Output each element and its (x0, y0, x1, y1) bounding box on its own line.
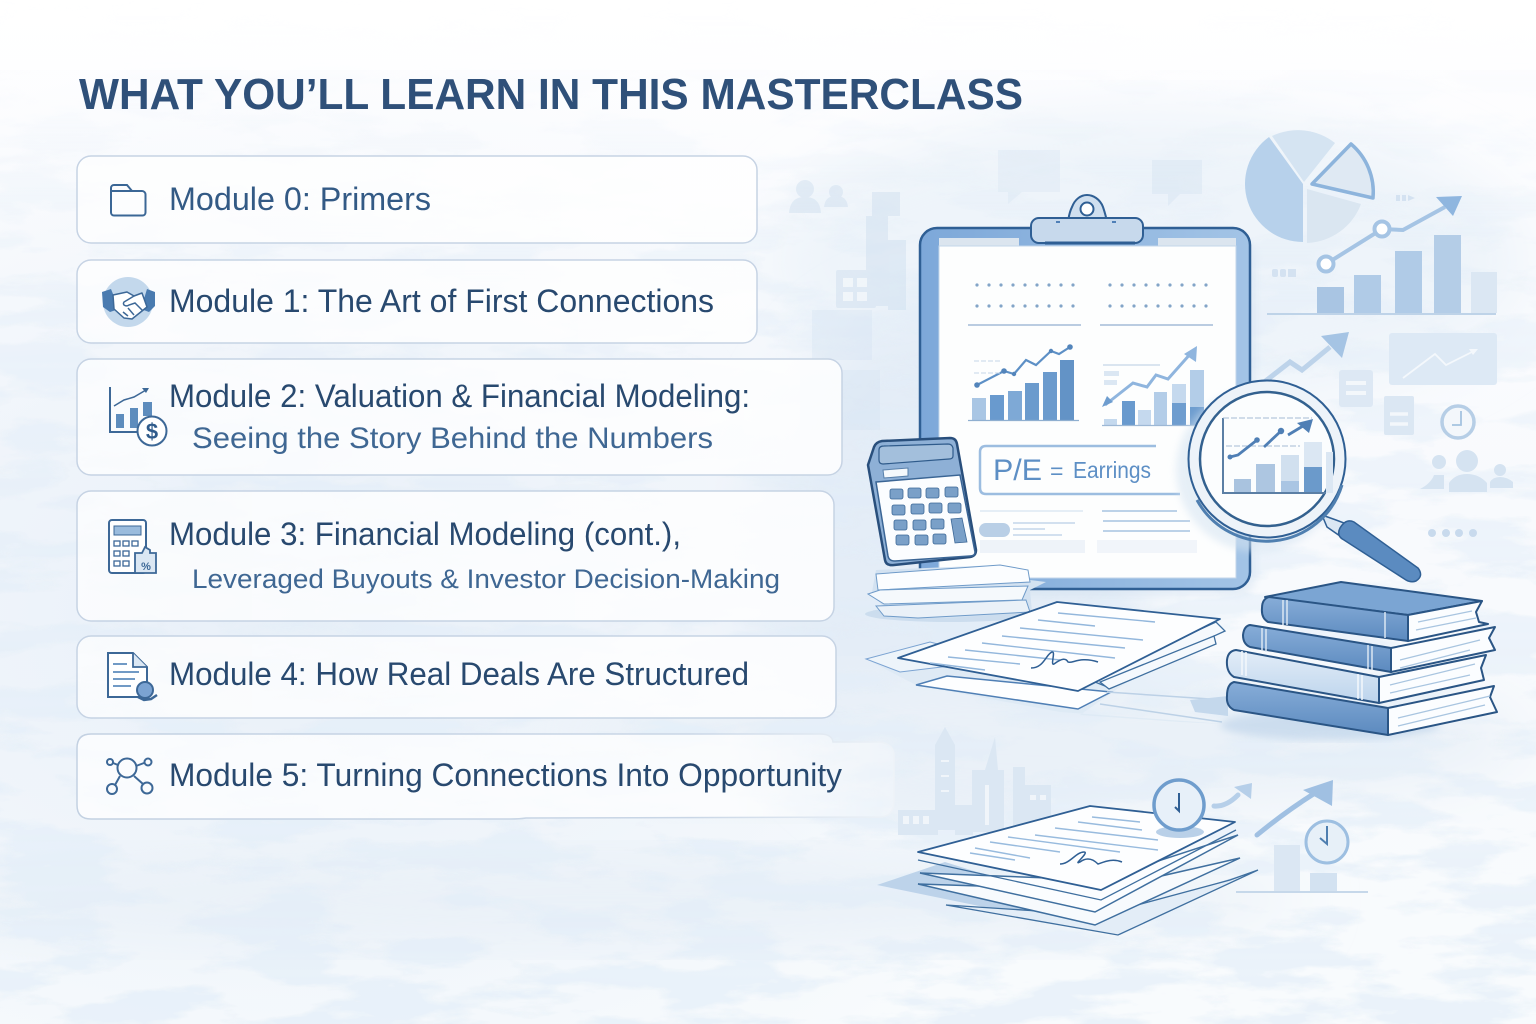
illustration: upper bar chart with trend line (1267, 196, 1497, 314)
signature (1060, 852, 1122, 864)
formula box: P/E (993, 454, 1042, 487)
illustration: clipboard (920, 195, 1256, 596)
illustration: calculator (868, 438, 976, 565)
sublabel: module 3: Leveraged Buyouts & Investor Decision-Making (192, 564, 780, 594)
book page lines (1390, 611, 1490, 726)
clipboard chart: right bars (1102, 346, 1210, 426)
clipboard dotted rows (968, 283, 1213, 325)
illustration: signed documents, upper (866, 602, 1228, 724)
label: module 3: Module 3: Financial Modeling (cont.), (169, 516, 681, 552)
icon: document with globe (108, 653, 157, 700)
background faint icons: people, chat, skyline (789, 150, 1202, 430)
card: module 1 (77, 260, 757, 343)
label: module 2: Module 2: Valuation & Financial Modeling: (169, 378, 750, 414)
formula box: Earrings (1073, 457, 1151, 483)
card: module 4 (77, 636, 836, 718)
illustration: faint skyline (898, 727, 1051, 835)
book 4 (1227, 682, 1497, 735)
card: module 0 (77, 156, 757, 243)
label: module 1: Module 1: The Art of First Connections (169, 283, 714, 319)
icon: network (107, 758, 152, 794)
signature (1031, 652, 1098, 668)
magnifier handle (1322, 515, 1421, 582)
formula box (980, 446, 1180, 494)
icon: chart with dollar (110, 387, 166, 446)
illustration: lower bars with clock and arrow (1214, 780, 1368, 892)
illustration: signed documents, lower (877, 780, 1258, 935)
book 3 (1227, 650, 1486, 703)
formula box: = (1050, 458, 1063, 484)
calculator keys (890, 487, 967, 545)
illustration: book stack (1220, 582, 1497, 740)
illustration: faint side icons (1272, 195, 1513, 537)
clipboard clip (1031, 195, 1143, 243)
book 2 (1243, 625, 1495, 672)
label: module 5: Module 5: Turning Connections Into Opportunity (169, 757, 842, 793)
clock on documents (1154, 780, 1204, 838)
icon: handshake (102, 277, 155, 327)
card: module 5 (77, 734, 894, 819)
label: module 4: Module 4: How Real Deals Are Structured (169, 656, 749, 692)
illustration: pie chart (1245, 130, 1373, 243)
module list (77, 156, 894, 819)
card: module 3 (77, 491, 834, 621)
icon: chart with dollar: $ (146, 419, 158, 444)
title: WHAT YOU’LL LEARN IN THIS MASTERCLASS (79, 70, 1023, 119)
sublabel: module 2: Seeing the Story Behind the Numbers (192, 422, 713, 455)
card: module 2 (77, 359, 842, 475)
label: module 0: Module 0: Primers (169, 181, 431, 217)
note lines (979, 511, 1190, 537)
illustration: faint chart panel (1389, 333, 1497, 385)
illustration: stack of books under calculator (865, 565, 1046, 622)
icon: calculator and document: % (141, 561, 151, 573)
book 1 (1262, 582, 1488, 641)
clipboard chart: left bars (968, 344, 1079, 420)
illustration: background trend arrow (1263, 332, 1349, 383)
magnifier chart (1223, 418, 1333, 493)
icon: calculator and document (109, 520, 156, 573)
icon: folder (111, 185, 146, 216)
illustration: magnifying glass (1176, 380, 1421, 582)
